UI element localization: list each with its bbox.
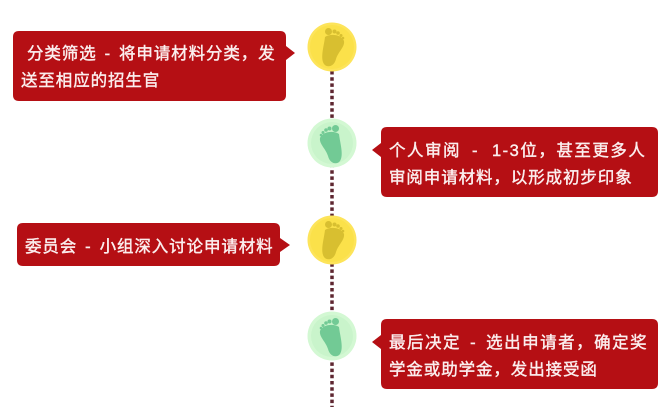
callout 3 text: 委员会 - 小组深入讨论申请材料 xyxy=(25,238,274,256)
step 2 footprint badge xyxy=(308,118,356,168)
timeline dotted line xyxy=(330,71,334,407)
callout box 3 background xyxy=(17,223,290,266)
callout 4 text line 2: 学金或助学金，发出接受函 xyxy=(389,361,598,379)
callout 2 text line 1: 个人审阅 - 1-3位，甚至更多人 xyxy=(389,142,646,160)
callout box 1 background xyxy=(13,31,295,101)
callout 1 text line 2: 送至相应的招生官 xyxy=(21,72,160,90)
callout 2 text line 2: 审阅申请材料，以形成初步印象 xyxy=(389,169,633,187)
step 1 footprint badge xyxy=(308,22,356,72)
step 3 footprint badge xyxy=(308,216,356,264)
callout 1 text line 1: 分类筛选 - 将申请材料分类，发 xyxy=(27,44,276,62)
callout 4 text line 1: 最后决定 - 选出申请者，确定奖 xyxy=(389,334,648,352)
step 4 footprint badge xyxy=(308,312,356,360)
callout box 2 background xyxy=(372,127,658,197)
callout box 4 background xyxy=(372,319,658,389)
